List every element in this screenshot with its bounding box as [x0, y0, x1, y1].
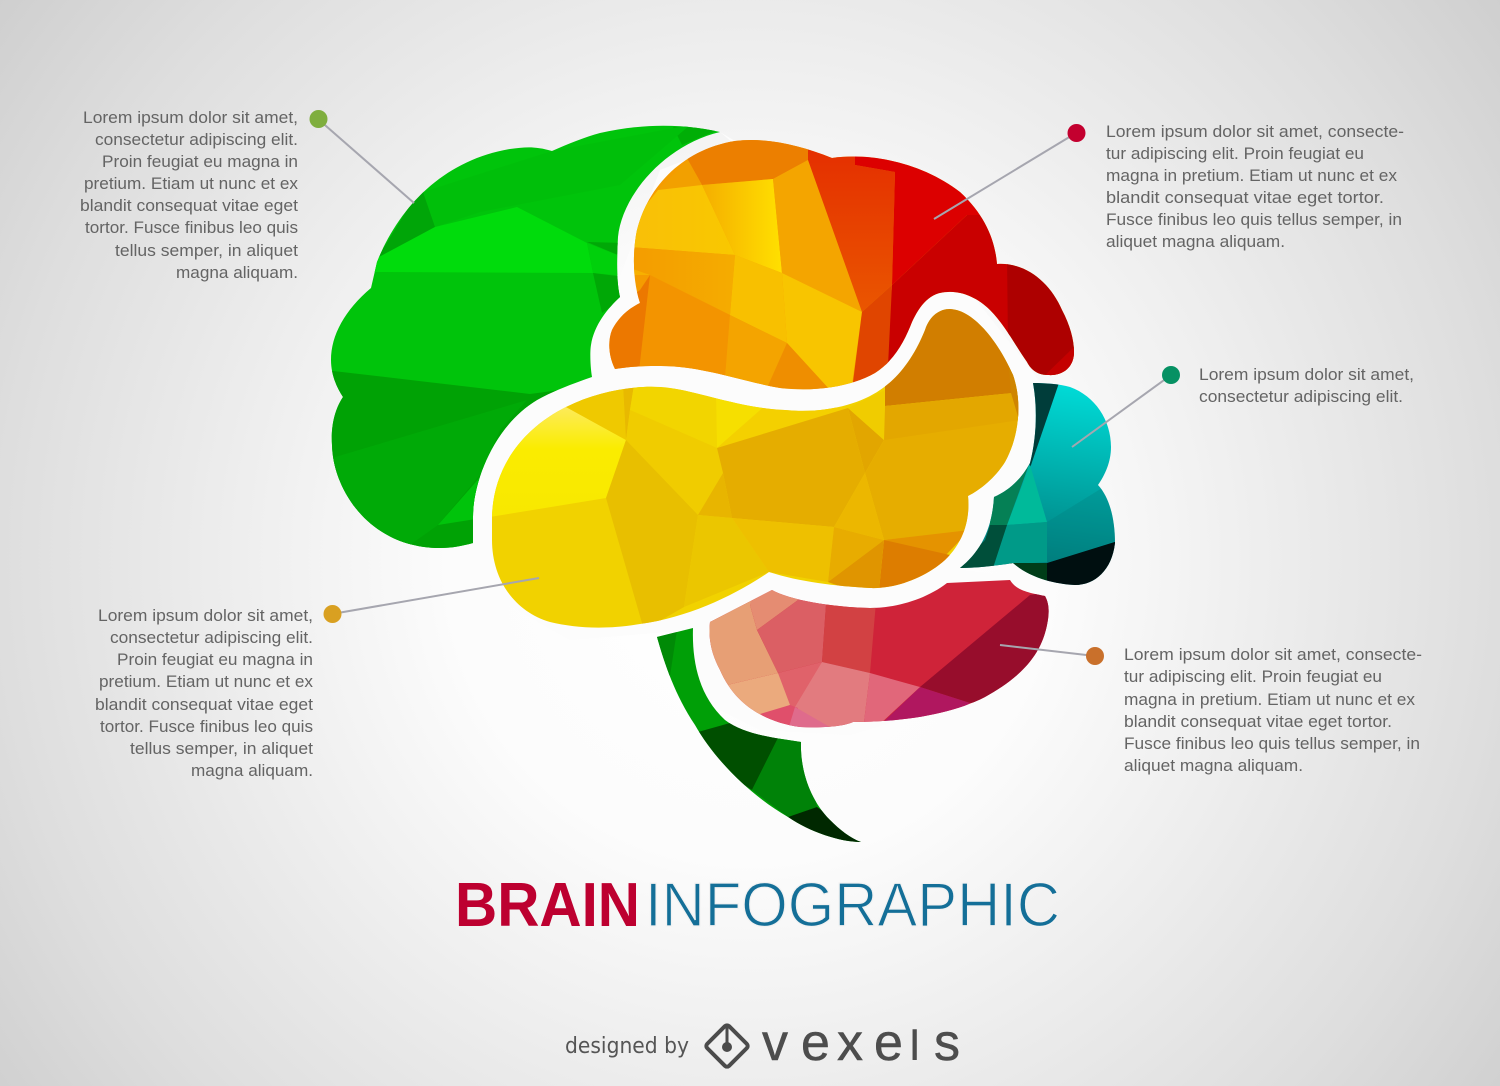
text block: bottom left: Proin feugiat eu magna in: [117, 651, 313, 669]
text block: bottom left: consectetur adipiscing elit.: [110, 629, 313, 647]
title: [455, 871, 1060, 940]
text block: bottom right: Fusce finibus leo quis tellus semper, in: [1124, 735, 1420, 753]
text block: top left: Proin feugiat eu magna in: [102, 153, 298, 171]
brain illustration: [320, 110, 1120, 845]
text block: bottom right: aliquet magna aliquam.: [1124, 757, 1303, 775]
text block: top right: Fusce finibus leo quis tellus semper, in: [1106, 211, 1402, 229]
marker dot: red: [1068, 124, 1086, 142]
text block: top left: tellus semper, in aliquet: [115, 242, 298, 260]
text block: middle right: Lorem ipsum dolor sit amet,: [1199, 366, 1414, 384]
text block: top left: blandit consequat vitae eget: [80, 197, 298, 215]
text block: top right: [1106, 123, 1404, 251]
title: INFOGRAPHIC: [645, 871, 1060, 940]
lobe: teal occipital: [960, 383, 1115, 585]
text block: top right: tur adipiscing elit. Proin feugiat eu: [1106, 145, 1364, 163]
text block: bottom left: Lorem ipsum dolor sit amet,: [98, 607, 313, 625]
text block: bottom right: [1124, 646, 1422, 775]
text block: bottom right: magna in pretium. Etiam ut nunc et ex: [1124, 691, 1416, 709]
text block: top right: Lorem ipsum dolor sit amet, consecte-: [1106, 123, 1404, 141]
lobe: green brain stem: [657, 628, 861, 842]
text block: top left: magna aliquam.: [176, 264, 298, 282]
text block: top left: tortor. Fusce finibus leo quis: [85, 219, 298, 237]
text block: top left: consectetur adipiscing elit.: [95, 131, 298, 149]
leader line: yellow: [332, 578, 539, 614]
leader line: green: [318, 119, 414, 203]
text block: bottom left: [95, 607, 314, 780]
marker dot: yellow: [324, 605, 342, 623]
footer credit: designed by vexels: designed by: [565, 1034, 689, 1059]
text block: bottom right: blandit consequat vitae eget tortor.: [1124, 713, 1392, 731]
lobe: orange and red parietal: [609, 140, 1074, 390]
text block: top right: aliquet magna aliquam.: [1106, 233, 1285, 251]
text block: bottom right: tur adipiscing elit. Proin feugiat eu: [1124, 668, 1382, 686]
marker dot: green: [310, 110, 328, 128]
text block: top left: Lorem ipsum dolor sit amet,: [83, 109, 298, 127]
lobe: green frontal: [331, 126, 720, 548]
text block: bottom left: magna aliquam.: [191, 762, 313, 780]
leader line: pink: [1000, 645, 1095, 656]
title: BRAIN: [455, 871, 640, 940]
text block: middle right: [1199, 366, 1414, 406]
footer credit: designed by vexels: vexel s: [762, 1014, 960, 1072]
text block: middle right: consectetur adipiscing elit.: [1199, 388, 1403, 406]
text block: top right: blandit consequat vitae eget tortor.: [1106, 189, 1384, 207]
text block: bottom left: pretium. Etiam ut nunc et ex: [99, 673, 314, 691]
leader line: teal: [1072, 375, 1171, 447]
lobe: yellow temporal: [485, 300, 1030, 635]
text block: bottom left: tellus semper, in aliquet: [130, 740, 313, 758]
leader line: red: [934, 133, 1076, 219]
text block: bottom right: Lorem ipsum dolor sit amet, consecte-: [1124, 646, 1422, 664]
text block: bottom left: blandit consequat vitae eget: [95, 696, 313, 714]
marker dot: teal: [1162, 366, 1180, 384]
text block: top left: [80, 109, 299, 282]
footer credit: designed by vexels: [565, 1014, 960, 1072]
marker dot: pink: [1086, 647, 1104, 665]
lobe: pink cerebellum: [710, 580, 1049, 728]
text block: top right: magna in pretium. Etiam ut nunc et ex: [1106, 167, 1398, 185]
text block: bottom left: tortor. Fusce finibus leo quis: [100, 718, 313, 736]
text block: top left: pretium. Etiam ut nunc et ex: [84, 175, 299, 193]
